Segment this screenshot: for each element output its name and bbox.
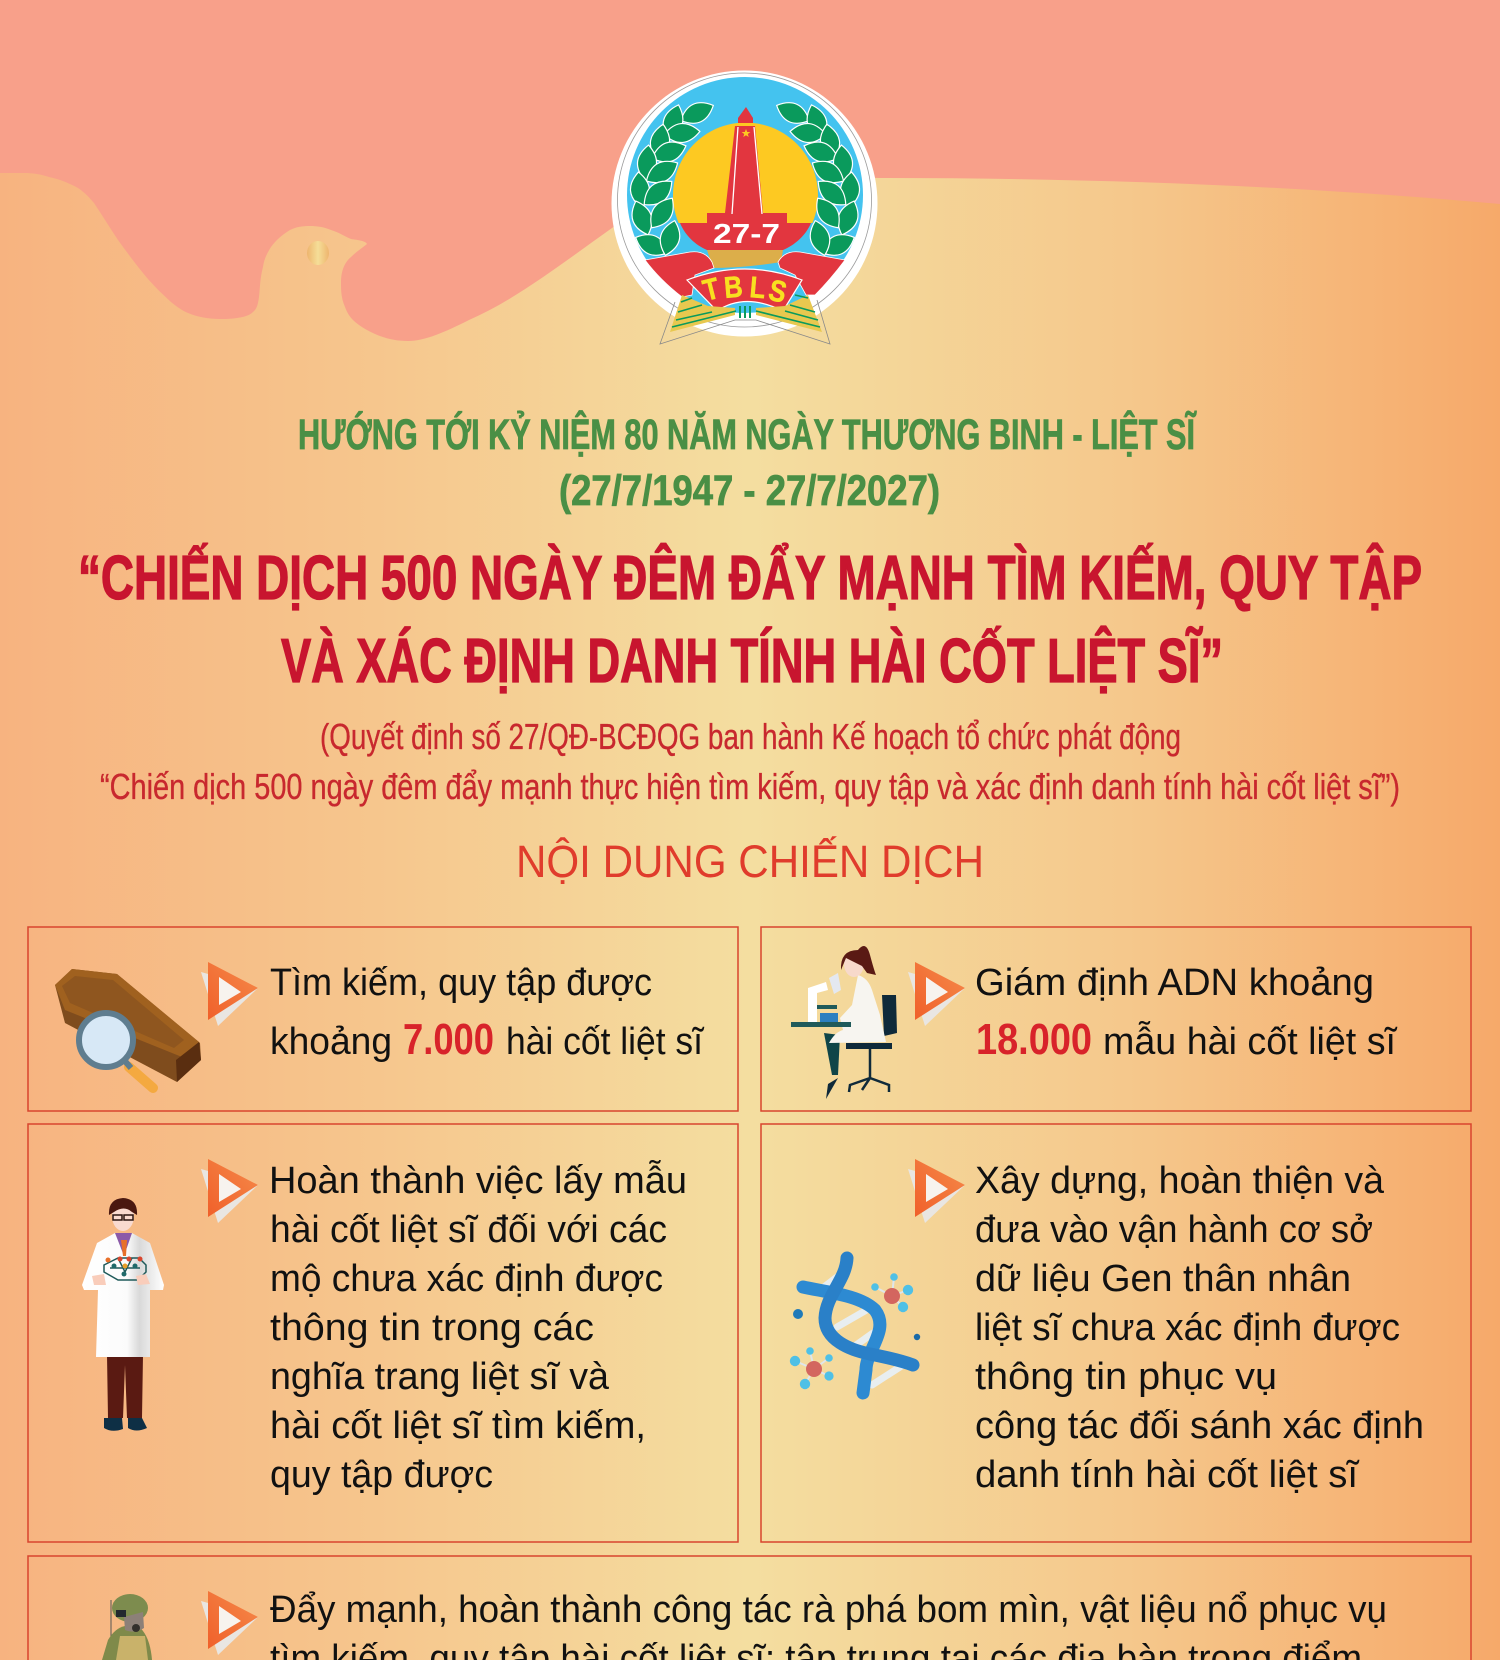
right laurel (773, 97, 863, 261)
icon: play arrow (201, 1591, 258, 1655)
logo: 27-7 TBLS emblem (612, 70, 878, 344)
text: hài cốt liệt sĩ tìm kiếm, (270, 1405, 646, 1447)
tan band (707, 250, 783, 268)
star (742, 129, 750, 137)
text (269, 1159, 687, 1496)
text: nghĩa trang liệt sĩ và (270, 1356, 610, 1398)
red ribbon (645, 252, 714, 297)
book (670, 295, 822, 332)
text: Đẩy mạnh, hoàn thành công tác rà phá bom mìn, vật liệu nổ phục vụ (270, 1589, 1387, 1631)
TBLS text: B (723, 270, 744, 304)
panel: gene database (761, 1124, 1471, 1542)
icon: man in lab coat holding molecule (82, 1198, 164, 1431)
text (270, 1589, 1387, 1660)
TBLS text: L (748, 270, 767, 305)
panel: mine clearance (28, 1556, 1471, 1660)
icon: play arrow (908, 1159, 965, 1223)
text: Xây dựng, hoàn thiện và (975, 1160, 1385, 1202)
text: danh tính hài cốt liệt sĩ (975, 1454, 1359, 1496)
TBLS text: S (765, 273, 790, 309)
text: thông tin phục vụ (975, 1356, 1277, 1398)
subtitle: decision reference (100, 716, 1400, 807)
heading: green commemoration line: (27/7/1947 - 27/7/2027) (559, 467, 940, 515)
section heading: NỘI DUNG CHIẾN DỊCH (516, 836, 984, 887)
dove eye (307, 241, 329, 265)
text: hài cốt liệt sĩ đối với các (270, 1209, 667, 1251)
text (270, 962, 704, 1064)
text (975, 962, 1397, 1064)
monument (680, 107, 811, 250)
panel: complete sampling (28, 1124, 738, 1542)
icon: coffin with magnifier (55, 969, 201, 1088)
text: thông tin trong các (270, 1307, 594, 1349)
left laurel (627, 97, 717, 261)
text: Giám định ADN khoảng (975, 962, 1374, 1004)
icon: play arrow (908, 962, 965, 1026)
text: đưa vào vận hành cơ sở (975, 1209, 1373, 1251)
text: dữ liệu Gen thân nhân (975, 1258, 1351, 1300)
text: mẫu hài cốt liệt sĩ (1103, 1020, 1397, 1063)
TBLS text: T (699, 271, 723, 307)
panel: search and gather remains (28, 927, 738, 1111)
text: 7.000 (403, 1015, 494, 1064)
text: Tìm kiếm, quy tập được (270, 962, 652, 1004)
text: hài cốt liệt sĩ (506, 1021, 704, 1063)
icon: DNA helix with molecules (790, 1258, 920, 1393)
text (975, 1160, 1424, 1496)
text: khoảng (270, 1021, 392, 1063)
27-7 text: 27-7 (713, 218, 780, 249)
icon: scientist at microscope (791, 946, 897, 1099)
text: Hoàn thành việc lấy mẫu (269, 1159, 687, 1202)
text: quy tập được (270, 1454, 493, 1496)
text: 18.000 (976, 1015, 1092, 1064)
text: công tác đối sánh xác định (975, 1405, 1424, 1447)
icon: soldier (102, 1594, 152, 1660)
text: mộ chưa xác định được (270, 1258, 663, 1300)
icon: play arrow (201, 962, 258, 1026)
TBLS text (699, 270, 790, 309)
icon: play arrow (201, 1159, 258, 1223)
ribbon tips outline (660, 300, 830, 344)
subtitle: decision reference: (Quyết định số 27/QĐ-BCĐQG ban hành Kế hoạch tổ chức phát động (320, 716, 1181, 757)
title: campaign name (78, 544, 1422, 696)
panel: DNA testing (761, 927, 1471, 1111)
text: liệt sĩ chưa xác định được (975, 1307, 1400, 1349)
heading: green commemoration line (298, 410, 1197, 515)
salmon header shape with dove silhouette (0, 0, 1500, 341)
